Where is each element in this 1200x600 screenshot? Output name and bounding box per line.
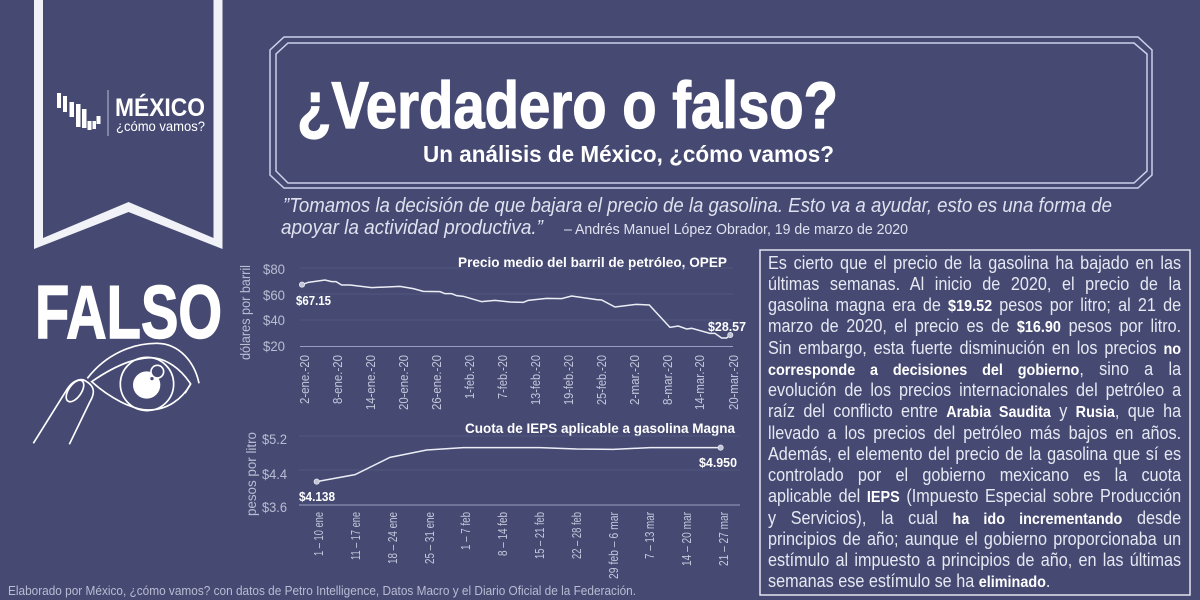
x axis labels: 7 – 13 mar	[643, 512, 657, 559]
y axis ticks: $4.4	[262, 466, 287, 482]
x axis labels: 8 – 14 feb	[496, 512, 510, 556]
x axis labels: 22 – 28 feb	[570, 512, 584, 559]
source note: Elaborado por México, ¿cómo vamos? con datos de Petro Intelligence, Datos Macro y el Diario Oficial de la Federación.	[8, 583, 636, 598]
explanation text	[768, 252, 1182, 591]
verdict: FALSO: FALSO	[35, 270, 222, 354]
explanation box border	[760, 250, 1190, 595]
explanation text: principios de año; aunque el gobierno proporcionaba un	[768, 529, 1181, 549]
explanation text: últimas semanas. Al inicio de 2020, el precio de la	[768, 274, 1181, 294]
IEPS line	[314, 445, 723, 484]
explanation text: y Servicios), la cual ha ido incrementando desde	[768, 508, 1181, 528]
chart: cuota de IEPS	[244, 420, 740, 579]
chart title: Precio medio del barril de petróleo, OPEP	[458, 254, 727, 270]
x axis labels: 2-mar.-20	[628, 355, 642, 405]
title: ¿Verdadero o falso?	[297, 68, 838, 142]
chart: precio del barril de petróleo	[238, 254, 746, 410]
y axis ticks	[263, 261, 285, 354]
oil price line	[299, 280, 733, 338]
x axis labels: 15 – 21 feb	[533, 512, 547, 559]
logo: México ¿cómo vamos?: ¿cómo vamos?	[116, 118, 205, 134]
value label start: $67.15	[296, 293, 331, 308]
x axis labels: 1 – 10 ene	[312, 512, 326, 556]
x axis labels: 1 – 7 feb	[459, 512, 473, 550]
explanation text: gasolina magna era de $19.52 pesos por litro; al 21 de	[768, 295, 1181, 315]
x axis labels: 19-feb.-20	[562, 355, 576, 405]
subtitle: Un análisis de México, ¿cómo vamos?	[423, 141, 834, 167]
explanation text: semanas ese estímulo se ha eliminado.	[768, 571, 1050, 591]
x axis labels: 14-mar.-20	[693, 355, 707, 410]
icon: eye with finger	[33, 343, 199, 444]
logo: México ¿cómo vamos?	[57, 90, 205, 136]
x axis labels: 1-feb.-20	[463, 355, 477, 399]
y axis ticks: $5.2	[262, 431, 287, 447]
title frame	[270, 37, 1152, 188]
x axis labels: 25-feb.-20	[595, 355, 609, 405]
grid lines	[299, 436, 740, 470]
x axis labels	[312, 512, 731, 579]
x axis labels: 29 feb – 6 mar	[607, 512, 621, 579]
y axis title: pesos por litro	[244, 432, 259, 516]
chart title: Cuota de IEPS aplicable a gasolina Magna	[465, 420, 735, 436]
quote attribution: – Andrés Manuel López Obrador, 19 de marzo de 2020	[564, 222, 908, 238]
y axis title: dólares por barril	[238, 265, 253, 360]
y axis ticks: $40	[263, 312, 285, 328]
explanation text: corresponde a decisiones del gobierno, sino a la	[768, 359, 1181, 379]
explanation text: marzo de 2020, el precio es de $16.90 pesos por litro.	[768, 316, 1181, 336]
x axis labels: 20-mar.-20	[727, 355, 741, 410]
explanation text: evolución de los precios internacionales del petróleo a	[768, 380, 1181, 400]
x axis labels: 25 – 31 ene	[423, 512, 437, 564]
explanation text: Sin embargo, esta fuerte disminución en los precios no	[768, 338, 1181, 358]
x axis labels: 2-ene.-20	[298, 355, 312, 404]
x axis labels: 14-ene.-20	[364, 355, 378, 410]
y axis ticks: $3.6	[262, 499, 287, 515]
value label end: $28.57	[708, 319, 746, 334]
x axis labels: 26-ene.-20	[430, 355, 444, 410]
value label end: $4.950	[699, 455, 737, 470]
x axis labels: 20-ene.-20	[397, 355, 411, 410]
logo: México ¿cómo vamos?: MÉXICO	[115, 93, 205, 122]
explanation text: raíz del conflicto entre Arabia Saudita y Rusia, que ha	[768, 401, 1181, 421]
x axis labels	[298, 355, 741, 410]
explanation text: Es cierto que el precio de la gasolina ha bajado en las	[768, 252, 1181, 272]
value label start: $4.138	[299, 489, 335, 504]
explanation text: llevado a los precios del petróleo más bajos en años.	[768, 423, 1181, 443]
y axis ticks: $80	[263, 261, 285, 277]
explanation text: estímulo al impuesto a principios de año, en las últimas	[768, 550, 1181, 570]
x axis labels: 21 – 27 mar	[717, 512, 731, 566]
quote	[281, 195, 1112, 239]
grid lines	[300, 268, 733, 320]
x axis labels: 8-mar.-20	[661, 355, 675, 405]
y axis ticks: $20	[263, 338, 285, 354]
x axis labels: 8-ene.-20	[331, 355, 345, 404]
quote: apoyar la actividad productiva.”	[281, 217, 544, 239]
explanation text: aplicable del IEPS (Impuesto Especial sobre Producción	[768, 486, 1181, 506]
quote: ”Tomamos la decisión de que bajara el precio de la gasolina. Esto va a ayudar, esto es una forma de	[283, 195, 1112, 217]
y axis ticks: $60	[263, 287, 285, 303]
x axis labels: 13-feb.-20	[529, 355, 543, 405]
explanation text: Además, el elemento del precio de la gasolina que sí es	[768, 444, 1181, 464]
x axis labels: 11 – 17 ene	[349, 512, 363, 560]
ribbon banner	[34, 0, 222, 249]
y axis ticks	[262, 431, 287, 515]
x axis labels: 7-feb.-20	[496, 355, 510, 399]
x axis labels: 18 – 24 ene	[386, 512, 400, 564]
explanation text: controlado por el gobierno mexicano es la cuota	[768, 465, 1181, 485]
x axis labels: 14 – 20 mar	[680, 512, 694, 566]
